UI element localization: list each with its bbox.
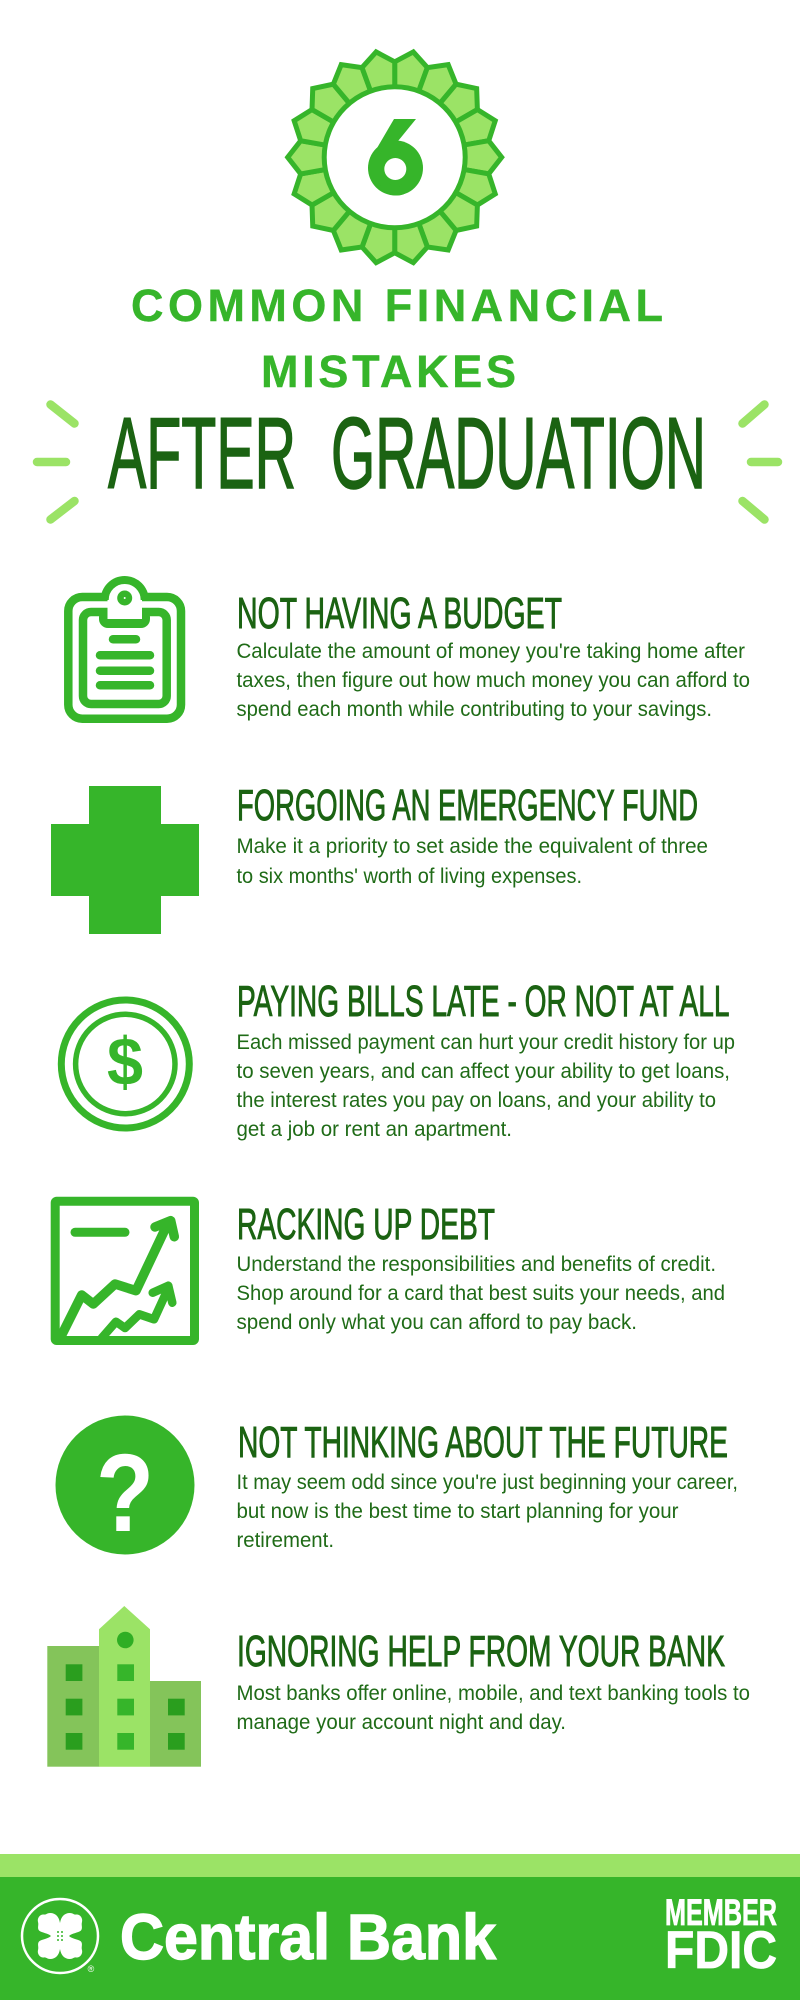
left burst rays — [37, 404, 74, 520]
title: common financial mistakes — [131, 280, 663, 397]
footer band — [0, 1854, 800, 2000]
icon: dollar coin: $ — [107, 1024, 143, 1100]
icon: medical cross — [51, 786, 199, 934]
body text: but now is the best time to start planning for your — [236, 1500, 679, 1523]
panel: racking up debt — [55, 1200, 725, 1340]
word: after: AFTER — [108, 398, 296, 510]
title line two: MISTAKES — [261, 346, 516, 397]
heading: NOT HAVING A BUDGET — [237, 589, 562, 638]
body text: taxes, then figure out how much money you can afford to — [236, 669, 750, 692]
member fdic mark: FDIC — [665, 1921, 777, 1980]
numeral 6: 6 — [375, 128, 416, 211]
numeral 6 — [368, 119, 423, 211]
icon: question mark: ? — [96, 1432, 154, 1555]
icon: dollar coin — [61, 1000, 189, 1128]
body text: Most banks offer online, mobile, and text banking tools to — [236, 1682, 750, 1705]
body text — [236, 1471, 738, 1552]
body text — [236, 835, 708, 888]
body text: to six months' worth of living expenses. — [236, 865, 582, 888]
body text: Make it a priority to set aside the equivalent of three — [236, 835, 708, 858]
body text: spend each month while contributing to your savings. — [236, 698, 712, 721]
member fdic mark — [665, 1892, 777, 1980]
heading: RACKING UP DEBT — [237, 1200, 495, 1249]
body text: It may seem odd since you're just beginning your career, — [236, 1471, 738, 1494]
badge: number six in a green rosette — [288, 49, 502, 266]
title: after graduation — [108, 398, 706, 510]
body text: retirement. — [236, 1529, 334, 1552]
icon: question mark — [56, 1416, 194, 1555]
panel: not thinking about the future — [56, 1416, 738, 1555]
right burst rays — [742, 404, 778, 520]
body text: the interest rates you pay on loans, and your ability to — [236, 1089, 716, 1112]
icon: clipboard — [68, 580, 181, 719]
body text — [236, 1031, 735, 1141]
wordmark: central bank: Central Bank — [120, 1901, 496, 1973]
panel: forgoing an emergency fund — [51, 781, 708, 934]
green base — [0, 1877, 800, 2000]
light green stripe — [0, 1854, 800, 1877]
body text: Calculate the amount of money you're taking home after — [236, 640, 745, 663]
body text: Understand the responsibilities and benefits of credit. — [236, 1253, 716, 1276]
body text: Each missed payment can hurt your credit history for up — [236, 1031, 735, 1054]
body text: Shop around for a card that best suits your needs, and — [236, 1282, 725, 1305]
panel: paying bills late — [61, 977, 735, 1141]
icon: bank building — [47, 1606, 201, 1767]
icon: rising chart — [55, 1201, 195, 1340]
logo: central bank flower — [22, 1899, 98, 1974]
logo: central bank flower: ® — [88, 1964, 95, 1974]
body text: get a job or rent an apartment. — [236, 1118, 512, 1141]
body text — [236, 640, 750, 721]
body text — [236, 1253, 725, 1334]
panel: not having a budget — [68, 580, 750, 721]
body text: spend only what you can afford to pay back. — [236, 1311, 637, 1334]
body text: to seven years, and can affect your ability to get loans, — [236, 1060, 730, 1083]
title line one: COMMON FINANCIAL — [131, 280, 663, 331]
panel: ignoring help from your bank — [47, 1606, 750, 1767]
body text — [236, 1682, 750, 1734]
body text: manage your account night and day. — [236, 1711, 566, 1734]
rosette petals — [288, 49, 502, 266]
